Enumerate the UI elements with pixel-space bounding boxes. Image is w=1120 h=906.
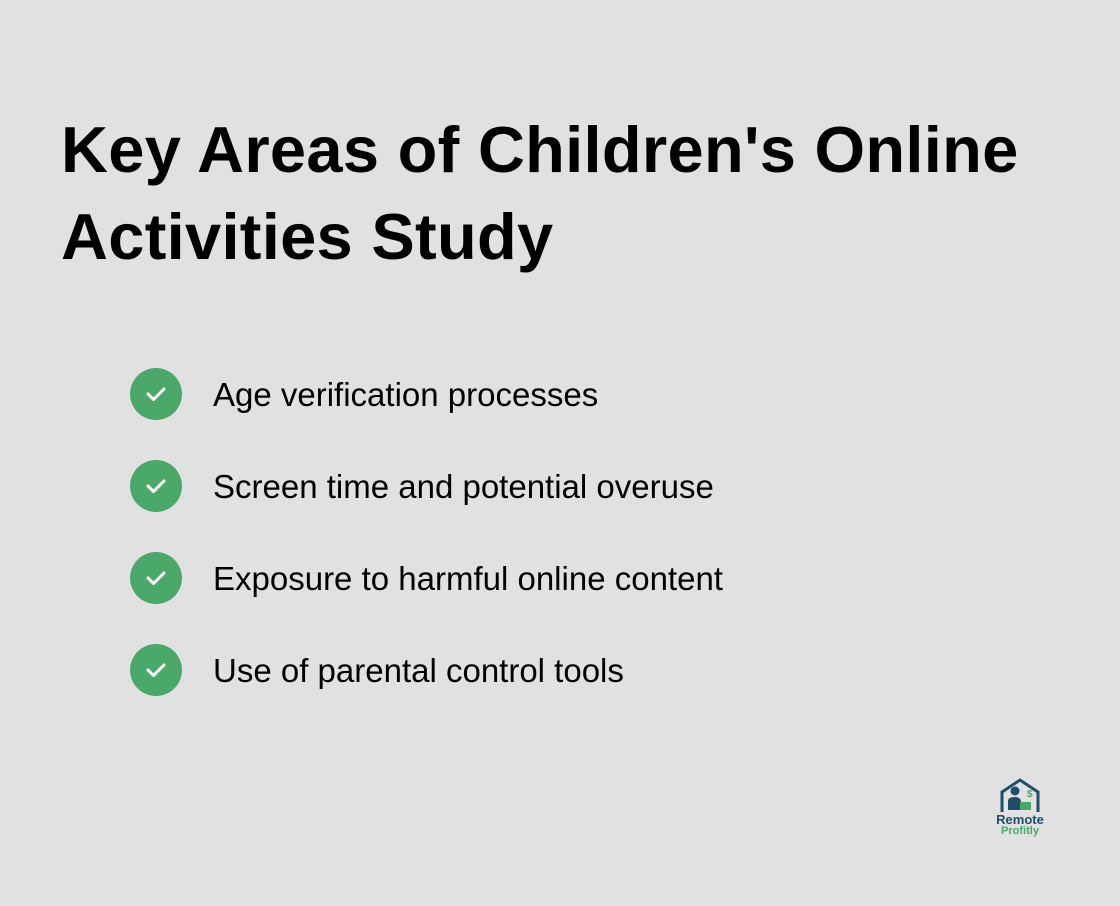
text: Use of parental control tools	[213, 652, 624, 689]
logo	[996, 778, 1044, 837]
icon: check	[130, 460, 182, 512]
title: Activities Study	[61, 200, 553, 273]
icon: check	[130, 552, 182, 604]
list item 3	[130, 552, 723, 604]
list item 1	[130, 368, 598, 420]
logo: Profitly	[1001, 825, 1040, 837]
icon: check	[130, 644, 182, 696]
list item 2	[130, 460, 714, 512]
text: Screen time and potential overuse	[213, 468, 714, 505]
icon: check	[130, 368, 182, 420]
logo: $	[1027, 789, 1033, 800]
title: Key Areas of Children's Online	[61, 113, 1019, 186]
list item 4	[130, 644, 624, 696]
text: Age verification processes	[213, 376, 598, 413]
logo: Remote	[996, 812, 1044, 827]
title	[61, 113, 1019, 273]
text: Exposure to harmful online content	[213, 560, 723, 597]
